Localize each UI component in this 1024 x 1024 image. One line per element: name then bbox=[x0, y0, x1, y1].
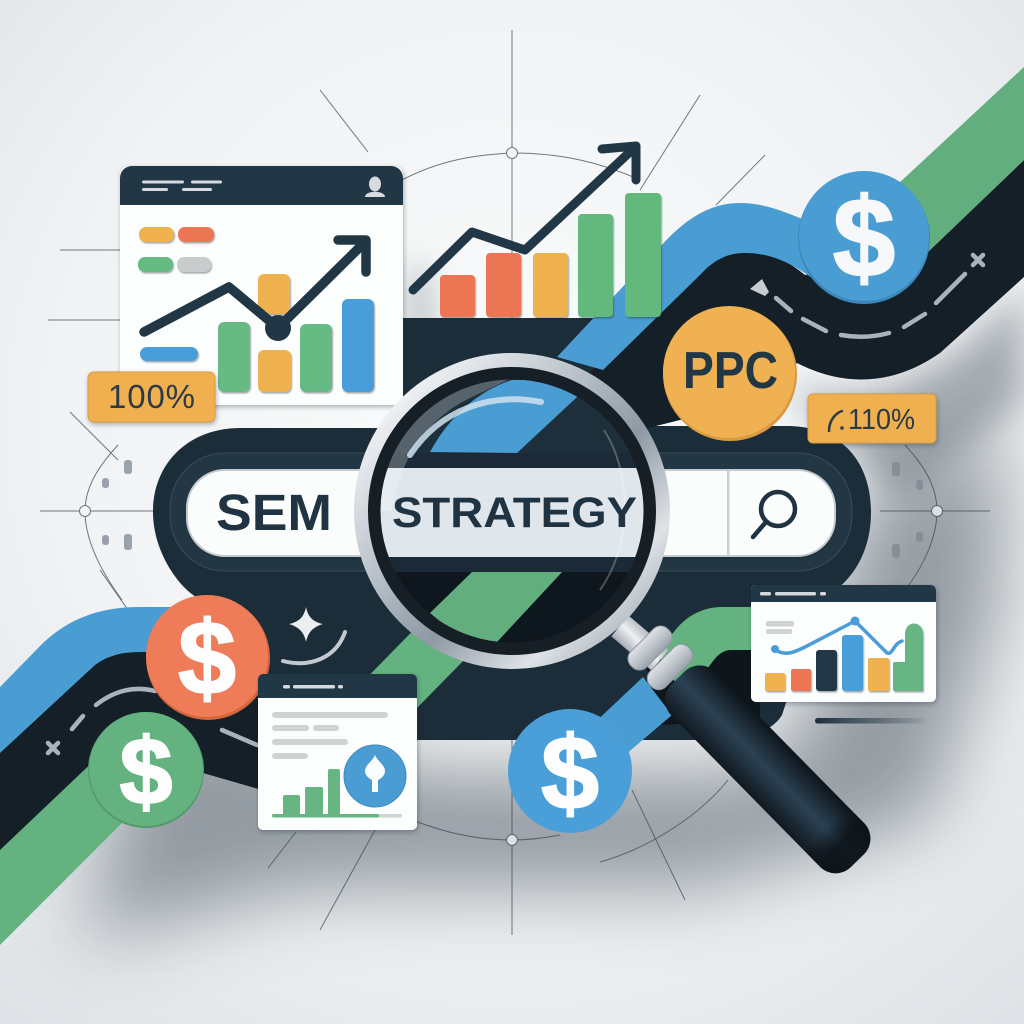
coin: top blue dollar: $ bbox=[833, 175, 895, 300]
label: SEM: SEM bbox=[216, 484, 332, 541]
search bar bbox=[187, 470, 835, 556]
coin: lower blue dollar bbox=[508, 709, 632, 833]
green ribbon: lower right bbox=[655, 607, 755, 690]
lens magnified bar bbox=[370, 468, 654, 557]
window header bbox=[258, 674, 417, 698]
panel: lower left report window bbox=[258, 674, 417, 830]
road arrow marker bbox=[750, 279, 769, 296]
lens green band bbox=[430, 571, 563, 642]
glass highlight bbox=[388, 380, 508, 468]
magnifier neck bbox=[620, 626, 660, 660]
window header bbox=[751, 585, 936, 602]
coin: PPC bbox=[663, 306, 797, 441]
central dark panel bbox=[153, 318, 871, 790]
lens silver ring bbox=[361, 360, 663, 662]
mini bars bbox=[272, 769, 379, 818]
guide node markers bbox=[506, 148, 518, 158]
lower left winding road bbox=[0, 648, 262, 860]
lens contents bbox=[380, 380, 644, 642]
bars bbox=[218, 274, 374, 392]
coin: green dollar: $ bbox=[120, 719, 172, 825]
magnifying glass bbox=[361, 360, 880, 882]
icon: user bbox=[365, 176, 385, 197]
top center growth chart bbox=[413, 146, 661, 317]
coin: green dollar bbox=[88, 712, 204, 828]
search bar backing bbox=[170, 453, 852, 571]
header text lines bbox=[142, 180, 222, 191]
icon: blue location badge bbox=[344, 745, 406, 807]
magnifier collars bbox=[624, 622, 697, 694]
badge: 100%: 100% bbox=[108, 378, 195, 415]
decorative fading bar bbox=[815, 718, 930, 724]
magnified label: STRATEGY: STRATEGY bbox=[392, 489, 637, 537]
text lines bbox=[766, 621, 794, 626]
icon: sparkle and arc bbox=[283, 607, 345, 663]
coin: PPC: PPC bbox=[683, 342, 778, 400]
text lines bbox=[272, 712, 402, 818]
panel: dashboard window bbox=[120, 166, 403, 405]
road dashes bbox=[776, 255, 983, 337]
search divider bbox=[727, 471, 730, 555]
lower road dashes bbox=[48, 689, 257, 753]
coin: top blue dollar bbox=[798, 171, 930, 304]
panel: lower right chart window bbox=[751, 585, 936, 702]
green ribbon: lower left bbox=[0, 755, 130, 945]
soft shadows under the artwork bbox=[80, 260, 1024, 940]
badge: 110%: 110% bbox=[848, 404, 915, 436]
window header bbox=[120, 166, 403, 205]
icon: search bbox=[753, 492, 795, 537]
blue ribbon: lower left bbox=[0, 607, 175, 753]
arrow: growth trend bbox=[413, 146, 636, 290]
upper winding road bbox=[560, 160, 1024, 430]
blue ribbon: lower right bbox=[590, 677, 672, 755]
magnifier handle bbox=[656, 656, 880, 882]
coin: red dollar: $ bbox=[178, 601, 236, 717]
coin: red dollar bbox=[146, 595, 270, 720]
coin: lower blue dollar: $ bbox=[541, 716, 599, 832]
trend node bbox=[265, 315, 291, 341]
badge: 110% bbox=[808, 394, 936, 443]
lens blue band bbox=[430, 380, 590, 453]
dark pocket under lower right ribbon bbox=[640, 640, 760, 725]
trend line bbox=[774, 621, 902, 653]
badge: 100% bbox=[88, 372, 215, 422]
lens black rim bbox=[374, 373, 650, 649]
blue ribbon: upper bbox=[557, 203, 815, 370]
small side glyphs bbox=[102, 460, 923, 558]
green ribbon: center bbox=[350, 603, 520, 708]
legend pills bbox=[138, 227, 214, 361]
bars bbox=[765, 624, 923, 691]
icon: small gauge bbox=[829, 411, 842, 431]
green ribbon: top right bbox=[870, 67, 1024, 260]
arrow: trend line bbox=[144, 240, 366, 332]
